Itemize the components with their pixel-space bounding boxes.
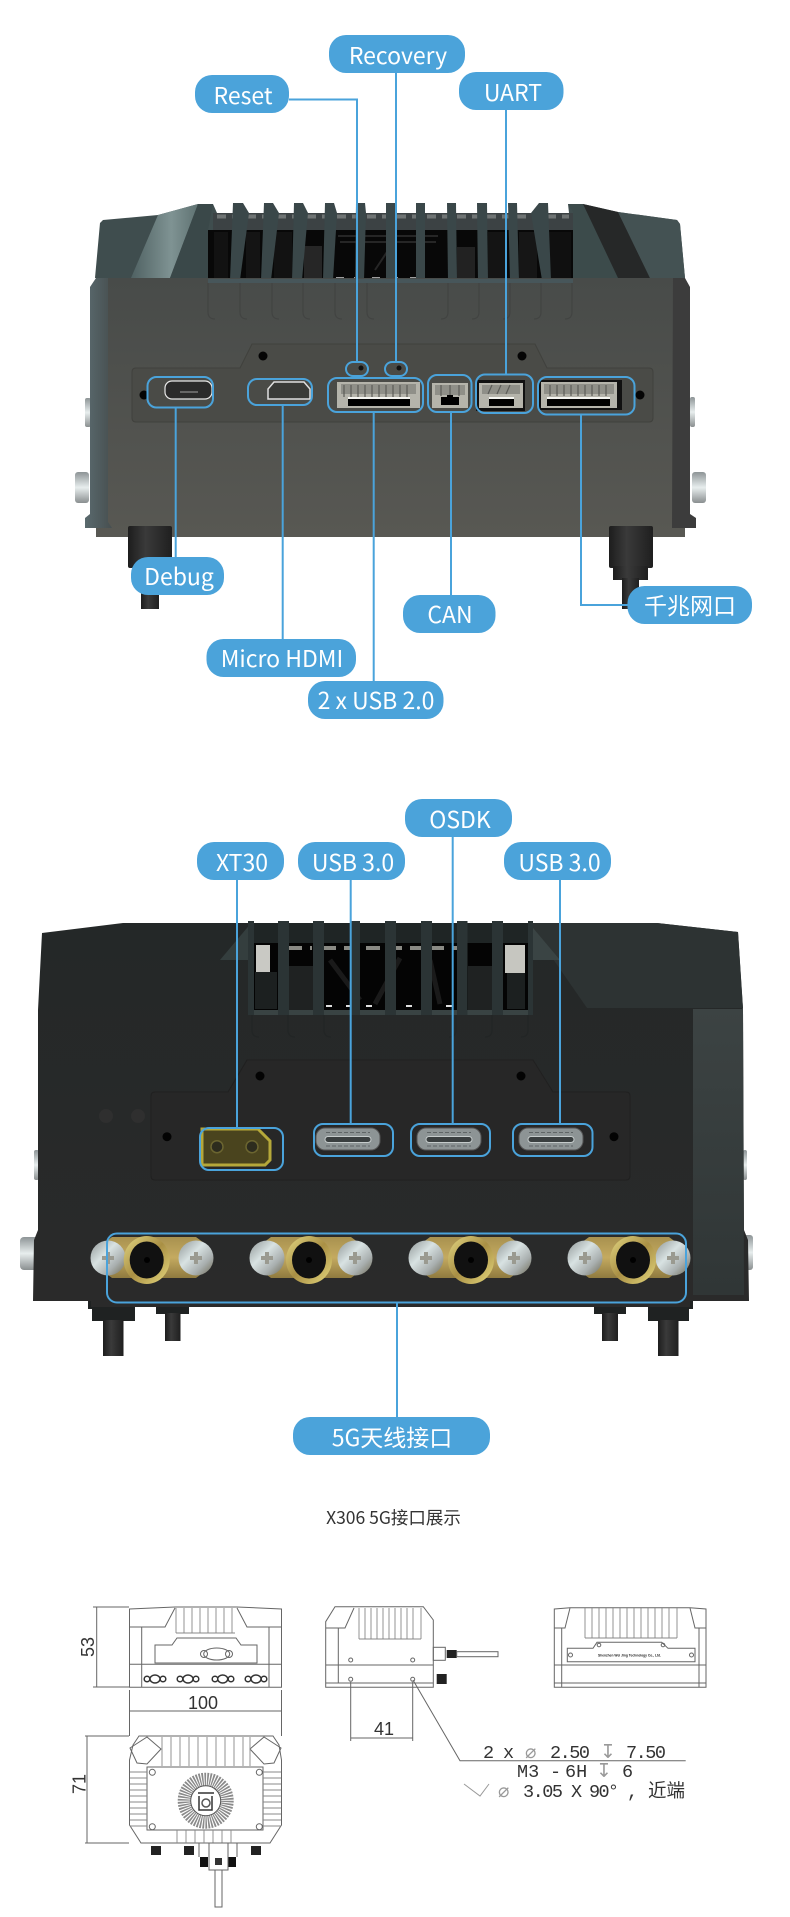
port: UART xyxy=(476,380,525,411)
spec line 1: ↧ xyxy=(600,1741,616,1763)
label pill: Reset xyxy=(195,75,289,113)
spec line 2: ↧ xyxy=(596,1760,612,1782)
port: micro HDMI xyxy=(268,382,310,399)
port: USB-C right xyxy=(519,1128,583,1150)
main body xyxy=(85,278,696,537)
dimension: 41 hole spacing xyxy=(351,1682,413,1741)
callout: Recovery xyxy=(329,35,465,376)
dimension: 100 width: 100 xyxy=(188,1693,218,1713)
port: dual USB 2.0 xyxy=(337,382,420,408)
right side screws xyxy=(690,397,706,503)
device: second view with 5G antenna ports xyxy=(20,921,753,1356)
spec line 2: - xyxy=(550,1762,561,1783)
interface plate xyxy=(99,1060,630,1180)
spec line 3: 近端 xyxy=(648,1781,685,1803)
label pill: XT30: XT30 xyxy=(216,844,268,878)
label pill: CAN xyxy=(403,595,496,633)
callout: Debug xyxy=(131,377,224,595)
label pill: Debug xyxy=(131,557,224,595)
antenna connector 3 xyxy=(408,1236,532,1284)
label pill: 千兆网口 xyxy=(628,586,752,624)
spec line 2 xyxy=(517,1760,633,1783)
dimension drawing: side view xyxy=(326,1607,498,1687)
spec line 1 xyxy=(483,1741,666,1764)
dimension drawing: front view xyxy=(130,1607,282,1687)
spec line 3 xyxy=(464,1780,685,1803)
left cable xyxy=(128,526,172,609)
label pill: 5G天线接口: 5G天线接口 xyxy=(332,1419,452,1453)
spec line 3: X xyxy=(571,1782,582,1803)
label pill: OSDK: OSDK xyxy=(429,801,491,835)
label pill: XT30 xyxy=(197,842,284,880)
label pill: OSDK xyxy=(405,799,512,837)
interface plate xyxy=(132,344,653,422)
dimension drawing: rear view: Shenzhen Wei Jing Technology Co., Ltd. xyxy=(598,1652,661,1658)
caption: X306 5G接口展示 xyxy=(326,1505,461,1530)
fan window xyxy=(252,923,529,1015)
label pill: Recovery xyxy=(329,35,465,73)
port: micro USB debug xyxy=(165,381,212,399)
antenna connector 1 xyxy=(90,1236,214,1284)
dimension: 71 depth: 71 xyxy=(70,1774,90,1794)
cooling fins xyxy=(248,921,533,1015)
hole specification leader and text xyxy=(413,1680,686,1803)
spec line 1: 2 xyxy=(483,1743,494,1764)
label pill: 千兆网口: 千兆网口 xyxy=(644,587,736,621)
mounting legs xyxy=(88,1295,693,1356)
dimension: 41 hole spacing: 41 xyxy=(374,1719,394,1739)
callout: 5G antenna ports xyxy=(107,1234,686,1455)
dimension: 100 width xyxy=(130,1690,282,1736)
dimension: 53 height xyxy=(78,1607,129,1687)
label pill: USB 3.0 left: USB 3.0 xyxy=(312,844,394,878)
callout: USB 3.0 left xyxy=(298,842,405,1156)
spec line 1: 7.50 xyxy=(626,1743,666,1764)
dimension: 71 depth xyxy=(70,1736,129,1843)
label pill: Recovery: Recovery xyxy=(349,37,447,71)
callout: OSDK xyxy=(405,799,512,1156)
label pill: 5G天线接口 xyxy=(293,1417,490,1455)
label pill: Debug: Debug xyxy=(144,558,214,592)
port: XT30 power xyxy=(202,1129,270,1165)
label pill: UART: UART xyxy=(484,74,542,108)
label pill: USB 3.0 left xyxy=(298,842,405,880)
right cable xyxy=(609,526,653,609)
dimension drawing: top view xyxy=(130,1736,282,1907)
dimension drawing: rear view xyxy=(554,1608,706,1687)
callout: USB 3.0 right xyxy=(504,842,611,1156)
label pill: USB 3.0 right xyxy=(504,842,611,880)
antenna connector 4 xyxy=(568,1236,690,1284)
spec line 1: ⌀ xyxy=(525,1741,536,1763)
port: USB-C left xyxy=(316,1128,380,1150)
label pill: Reset: Reset xyxy=(213,77,273,111)
spec line 2: M3 xyxy=(517,1762,539,1783)
callout: gigabit ethernet xyxy=(538,377,752,624)
antenna connector 2 xyxy=(250,1236,372,1284)
spec line 3: 90° xyxy=(589,1782,619,1803)
device: top view of interface side xyxy=(75,203,706,609)
spec line 3: , xyxy=(627,1782,638,1803)
label pill: UART xyxy=(459,72,564,110)
spec line 1: x xyxy=(503,1743,514,1764)
spec line 2: 6H xyxy=(565,1762,587,1783)
port: gigabit ethernet xyxy=(539,380,622,410)
port: CAN xyxy=(432,383,468,408)
spec line 1: 2.50 xyxy=(550,1743,590,1764)
side screws xyxy=(20,1150,753,1270)
callout: Reset xyxy=(195,75,368,376)
label pill: CAN: CAN xyxy=(427,596,473,630)
spec line 3: 3.05 xyxy=(523,1782,563,1803)
label pill: USB 3.0 right: USB 3.0 xyxy=(518,844,601,878)
callout: UART xyxy=(459,72,564,413)
port: USB-C OSDK xyxy=(417,1128,481,1150)
label pill: Micro HDMI: Micro HDMI xyxy=(221,640,343,674)
label pill: 2 x USB 2.0: 2 x USB 2.0 xyxy=(318,682,434,716)
fin band and fan window xyxy=(208,213,573,279)
spec line 2: 6 xyxy=(622,1762,633,1783)
callout: CAN xyxy=(403,375,496,633)
callout: Micro HDMI xyxy=(206,379,356,677)
fin pockets below window xyxy=(252,1015,528,1037)
dimension: 53 height: 53 xyxy=(78,1637,98,1657)
cooling fins xyxy=(230,203,551,280)
enclosure xyxy=(33,922,749,1307)
left side screws xyxy=(75,398,91,503)
spec line 3: ⌀ xyxy=(498,1780,509,1802)
upper heat-sink shell xyxy=(95,204,685,278)
callout: 2 x USB 2.0 xyxy=(308,378,444,719)
callout: XT30 xyxy=(197,842,284,1170)
